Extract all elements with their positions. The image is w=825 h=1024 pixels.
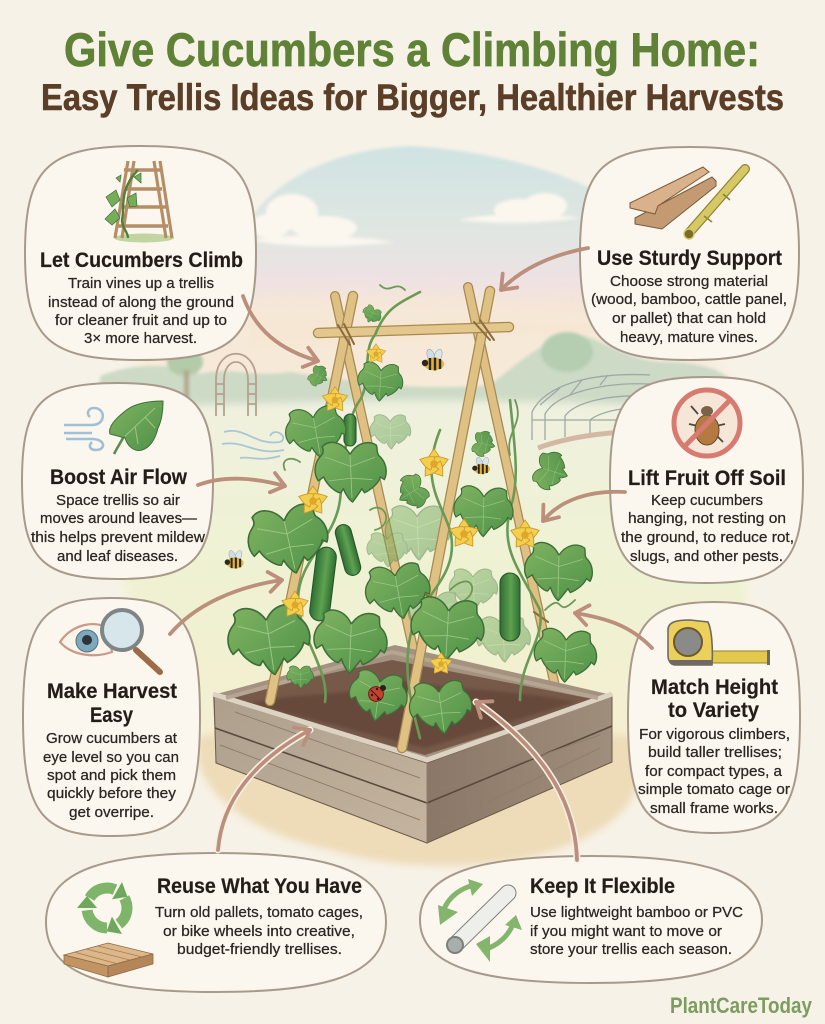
- panel: match height to variety: For vigorous climbers,: [639, 726, 790, 743]
- panel: keep it flexible: store your trellis each season.: [530, 941, 732, 958]
- panel: match height to variety: build taller trellises;: [648, 744, 782, 761]
- panel: boost air flow: moves around leaves—: [40, 510, 197, 527]
- raised wooden bed: [213, 645, 612, 843]
- distant hills: [100, 332, 735, 412]
- panel: let cucumbers climb: 3× more harvest.: [84, 330, 197, 347]
- cucumber leaves: [225, 303, 599, 737]
- panel: match height to variety: [628, 602, 800, 833]
- panel: make harvest easy: eye level so you can: [43, 749, 179, 766]
- icon: recycle arrows: [74, 882, 138, 939]
- panel: match height to variety: simple tomato cage or: [638, 781, 790, 798]
- icon: wooden pallet: [64, 943, 153, 977]
- trellis back poles: [335, 287, 558, 700]
- panel: lift fruit off soil: slugs, and other pests.: [630, 548, 783, 565]
- panel: use sturdy support: Choose strong material: [610, 273, 768, 290]
- icon: wind and leaf: [64, 401, 163, 454]
- greenhouse: [532, 375, 650, 448]
- faded background leaves: [367, 415, 530, 662]
- panel: lift fruit off soil: hanging, not resting on: [628, 510, 786, 527]
- icon: wood planks and bamboo: [630, 167, 745, 239]
- panel: match height to variety: small frame works.: [650, 800, 778, 817]
- cucumbers: [309, 414, 520, 641]
- ladybug: [369, 685, 386, 701]
- icon: pipe with arrows: [438, 879, 522, 962]
- panel: keep it flexible: if you might want to move or: [530, 923, 722, 940]
- bees: [225, 348, 490, 568]
- panel: keep it flexible: Keep It Flexible: [530, 875, 675, 898]
- panel: boost air flow: this helps prevent mildew: [31, 529, 205, 546]
- panel: make harvest easy: quickly before they: [47, 785, 177, 802]
- panel: boost air flow: Space trellis so air: [56, 492, 180, 509]
- left wood face: [214, 695, 427, 843]
- bed rim and planks: [213, 652, 612, 843]
- panel: boost air flow: and leaf diseases.: [57, 548, 178, 565]
- panel: lift fruit off soil: Lift Fruit Off Soil: [628, 467, 786, 490]
- panel: make harvest easy: Easy: [90, 704, 133, 727]
- right wood face: [427, 695, 612, 843]
- wind lines: [222, 431, 284, 459]
- title: [41, 23, 784, 118]
- panel: match height to variety: for compact types, a: [645, 763, 783, 780]
- flowers: [280, 344, 541, 676]
- panel: use sturdy support: heavy, mature vines.: [620, 329, 758, 346]
- panel: boost air flow: [22, 383, 213, 579]
- panel: use sturdy support: [580, 147, 799, 360]
- ground wash: [197, 735, 640, 866]
- panel: make harvest easy: Make Harvest: [47, 680, 177, 703]
- panel: let cucumbers climb: [25, 146, 256, 360]
- panel: reuse what you have: [46, 853, 386, 992]
- panel: let cucumbers climb: Let Cucumbers Climb: [40, 249, 243, 272]
- arrows from panels to plant: [170, 248, 652, 860]
- panel: keep it flexible: Use lightweight bamboo or PVC: [530, 904, 743, 921]
- panel: lift fruit off soil: the ground, to reduce rot,: [621, 529, 794, 546]
- panel: make harvest easy: [23, 598, 200, 836]
- icon: tape measure: [668, 620, 770, 665]
- panel: reuse what you have: Reuse What You Have: [157, 875, 362, 898]
- panel: boost air flow: Boost Air Flow: [50, 466, 188, 489]
- icon: eye and magnifying glass: [60, 610, 160, 672]
- panel: make harvest easy: get overripe.: [69, 804, 154, 821]
- soil: [226, 660, 598, 755]
- panel: let cucumbers climb: Train vines up a trellis: [68, 275, 214, 292]
- garden arch: [216, 354, 256, 416]
- panel: make harvest easy: spot and pick them: [47, 767, 176, 784]
- panel: reuse what you have: Turn old pallets, tomato cages,: [155, 904, 363, 921]
- panel: use sturdy support: Use Sturdy Support: [597, 247, 782, 270]
- trellis front poles: [270, 291, 548, 748]
- crossbar: [318, 327, 509, 333]
- panel: keep it flexible: [420, 856, 762, 983]
- panel: match height to variety: to Variety: [668, 699, 759, 722]
- panel: lift fruit off soil: [610, 377, 803, 583]
- garden scene background: [95, 146, 750, 866]
- panel: lift fruit off soil: Keep cucumbers: [651, 492, 763, 509]
- panel: use sturdy support: or pallet) that can hold: [612, 310, 766, 327]
- panel: make harvest easy: Grow cucumbers at: [46, 730, 178, 747]
- panel: reuse what you have: or bike wheels into creative,: [163, 923, 355, 940]
- cucumber vines: [284, 285, 575, 738]
- panel: let cucumbers climb: for cleaner fruit and up to: [55, 312, 227, 329]
- icon: no pests sign: [674, 390, 740, 456]
- panel: match height to variety: Match Height: [651, 676, 778, 699]
- panel: let cucumbers climb: instead of along the ground: [48, 294, 234, 311]
- panel: reuse what you have: budget-friendly trellises.: [177, 941, 342, 958]
- panel: use sturdy support: (wood, bamboo, cattle panel,: [591, 291, 787, 308]
- icon: ladder trellis with vine: [105, 161, 174, 242]
